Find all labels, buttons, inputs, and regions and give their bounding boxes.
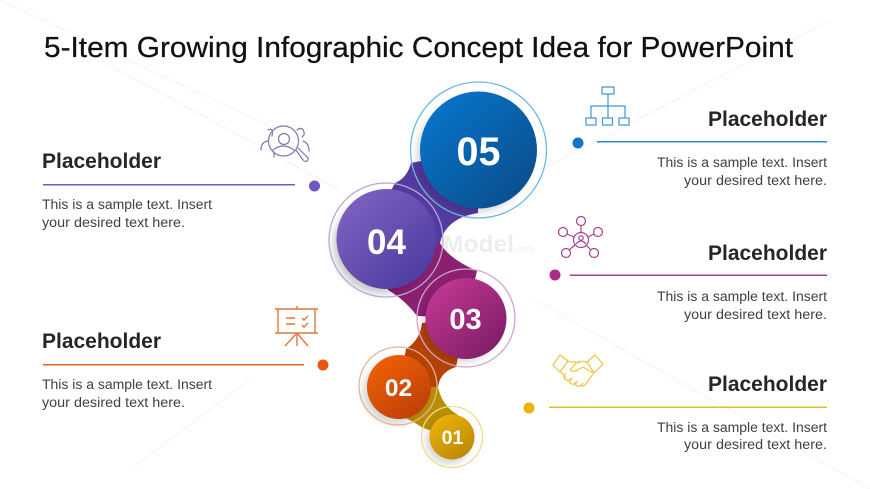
node 03 [417,269,515,367]
heading: Placeholder [42,150,161,173]
icon: network [558,216,602,258]
body text: your desired text here. [684,173,827,188]
connector 03 to 02 [399,318,466,387]
title: 5-Item Growing Infographic Concept Idea for PowerPoint [44,32,793,64]
panel: 04 upper left [42,126,320,230]
icon: people search [261,126,309,162]
marker dot and rule [550,270,827,280]
node 04: 04 [367,223,406,262]
heading: Placeholder [708,242,827,265]
panel: 03 middle right [550,216,827,322]
connector 05 to 04 [386,150,478,245]
panel: 01 bottom right [524,355,827,452]
heading: Placeholder [42,330,161,353]
icon: handshake [553,355,603,386]
node 04 [329,183,443,297]
body text: This is a sample text. Insert [657,155,827,170]
body text: This is a sample text. Insert [42,377,212,392]
body text: This is a sample text. Insert [42,197,212,212]
icon: org chart [586,87,629,125]
connector 04 to 03 [386,240,477,318]
node 05 [410,82,546,218]
panel: 05 top right [572,87,827,188]
body text: your desired text here. [684,307,827,322]
body text [657,155,827,188]
body text: This is a sample text. Insert [657,420,827,435]
node 01: 01 [442,427,463,449]
connector 02 to 01 [399,387,458,437]
watermark: .com [514,244,534,254]
body text: This is a sample text. Insert [657,289,827,304]
panel: 02 lower left [42,306,328,410]
node 05: 05 [457,130,500,174]
body text [42,377,212,410]
body text [657,289,827,322]
icon: presentation board [275,306,318,346]
growing circles diagram [329,82,546,468]
body text: your desired text here. [42,395,185,410]
node 01 [422,406,482,468]
marker dot and rule [524,402,827,414]
heading: Placeholder [708,373,827,396]
marker dot and rule [572,138,827,148]
body text: your desired text here. [684,437,827,452]
body text [42,197,212,230]
node 02 [359,347,437,425]
body text [657,420,827,452]
body text: your desired text here. [42,215,185,230]
node 03: 03 [449,304,482,336]
node 02: 02 [385,375,412,402]
marker dot and rule [43,360,328,370]
heading: Placeholder [708,108,827,131]
watermark: Model [443,231,514,258]
marker dot and rule [43,180,320,192]
